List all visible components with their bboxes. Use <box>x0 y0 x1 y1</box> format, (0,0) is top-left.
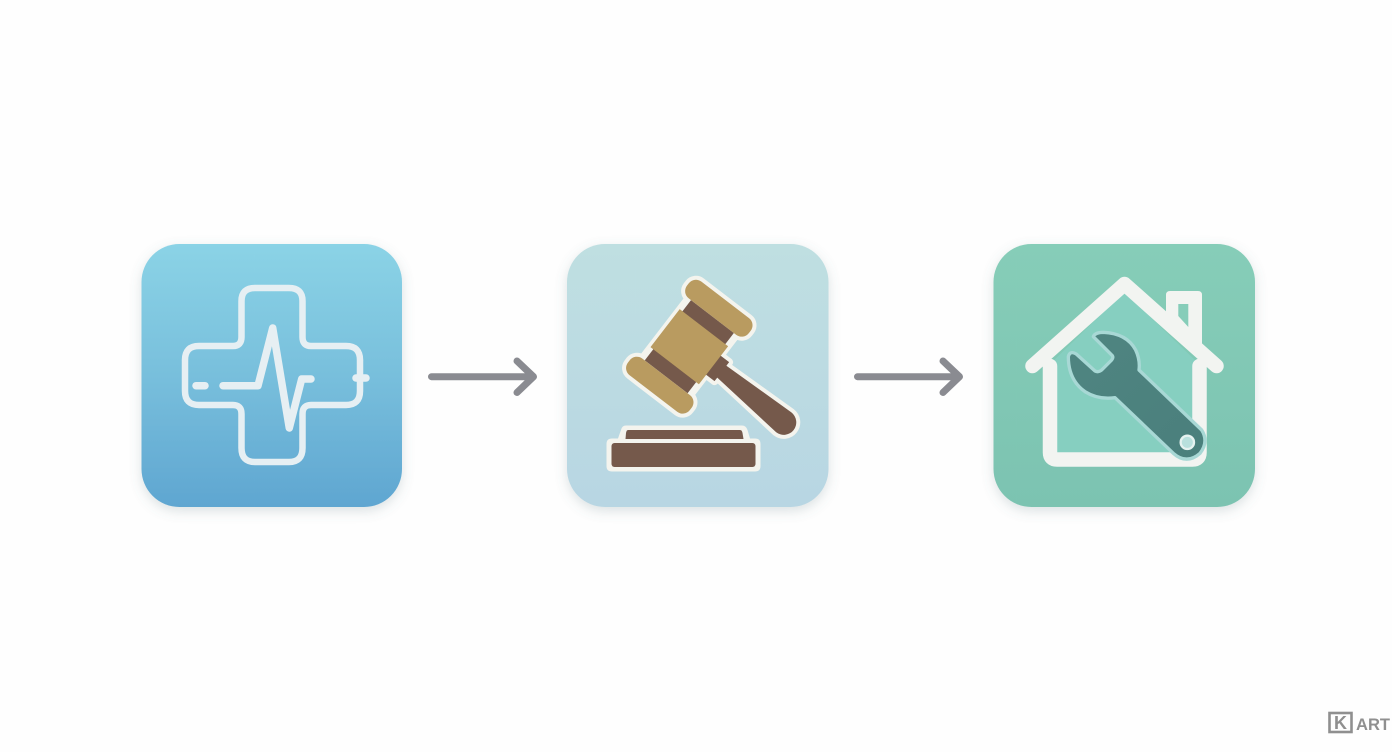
arrow: health to legal <box>432 361 534 392</box>
gavel upper cap <box>681 276 756 340</box>
panel: home repair card <box>994 244 1255 507</box>
gavel handle <box>704 355 803 440</box>
house interior <box>1050 292 1199 459</box>
watermark K box: K <box>1334 713 1347 733</box>
icon: gavel <box>622 276 831 475</box>
arrow: legal to home repair <box>858 361 960 392</box>
icon: sound block <box>606 426 760 472</box>
panel: health card <box>142 244 402 507</box>
gavel body <box>650 309 728 384</box>
sound block top <box>626 430 744 439</box>
card background: green <box>994 244 1255 507</box>
cross outline <box>185 288 360 462</box>
gavel outline <box>622 276 831 475</box>
gavel bands <box>645 300 734 393</box>
watermark text: ART <box>1356 715 1391 734</box>
icon: wrench <box>1068 332 1205 459</box>
wrench body <box>1068 332 1205 459</box>
sound block base <box>612 443 756 467</box>
icon: house <box>1032 284 1216 460</box>
chimney <box>1166 291 1202 356</box>
heartbeat line <box>196 328 311 428</box>
card background: blue <box>142 244 402 507</box>
house outline <box>1032 284 1216 460</box>
gavel lower cap <box>622 353 697 417</box>
panel: legal card <box>567 244 831 507</box>
heartbeat end tick <box>356 374 366 382</box>
watermark logo <box>1330 713 1391 734</box>
wrench hole <box>1181 436 1194 449</box>
chimney opening <box>1178 304 1188 327</box>
sound block outline <box>606 426 760 472</box>
card background: pale blue <box>567 244 828 507</box>
icon: medical cross with heartbeat <box>185 288 366 462</box>
